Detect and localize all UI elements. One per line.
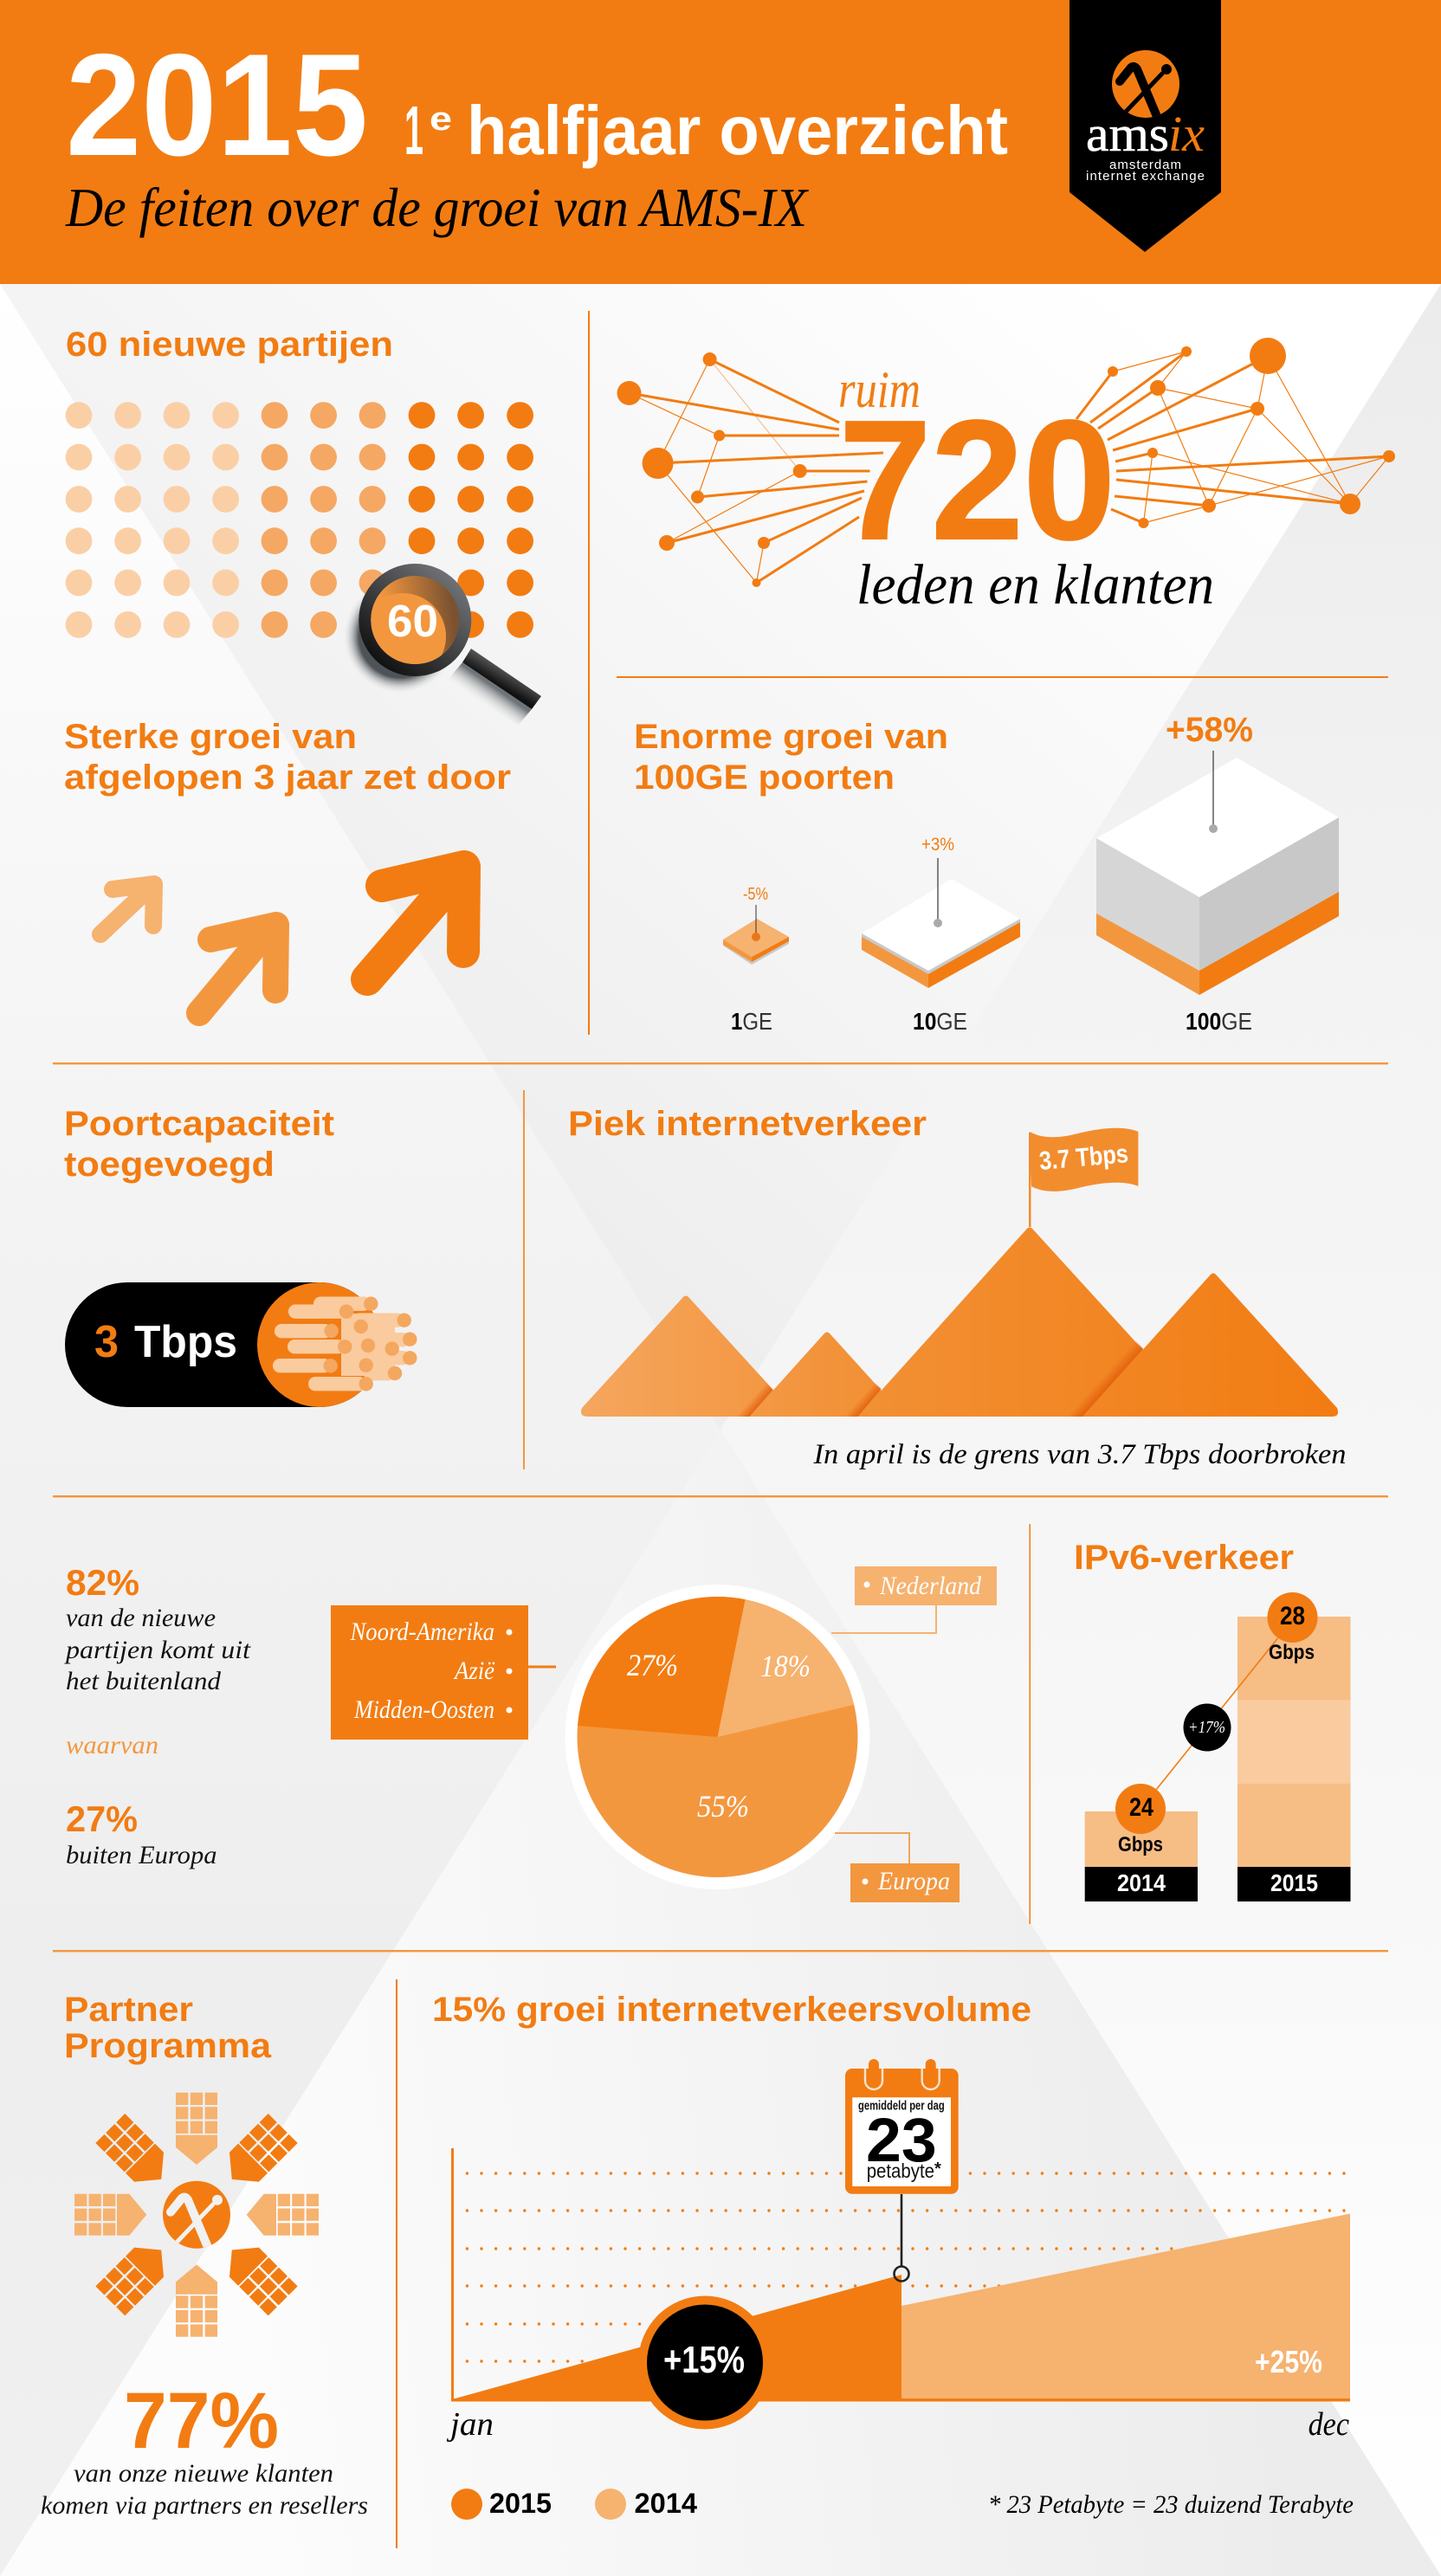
bubble 28 Gbps xyxy=(1268,1592,1318,1664)
legend: 2014 xyxy=(634,2488,697,2519)
axis label dec: dec xyxy=(1309,2406,1349,2443)
mountains xyxy=(581,1228,1338,1417)
panel: partner programma xyxy=(41,1991,368,2520)
subtitle: De feiten over de groei van AMS-IX xyxy=(65,177,810,238)
footnote: * 23 Petabyte = 23 duizend Terabyte xyxy=(988,2490,1354,2519)
heading: 60 nieuwe partijen xyxy=(66,326,393,364)
callout: Nederland: Nederland xyxy=(879,1572,982,1600)
heading: Sterke groei van xyxy=(64,718,357,756)
arrow medium xyxy=(199,925,276,1013)
heading: Poortcapaciteit xyxy=(64,1105,334,1143)
magnifier xyxy=(343,564,541,726)
panel: poortcapaciteit xyxy=(64,1105,417,1407)
divider: vertical row 2 xyxy=(523,1090,525,1469)
cube 1GE: 1GE xyxy=(731,1008,772,1035)
bar 2015 xyxy=(1237,1617,1351,1901)
heading: Piek internetverkeer xyxy=(568,1105,927,1143)
divider: vertical row 4 xyxy=(396,1979,397,2548)
cube 10GE xyxy=(862,835,1020,1035)
caption: In april is de grens van 3.7 Tbps doorbroken xyxy=(812,1439,1346,1470)
cable icon xyxy=(65,1282,417,1407)
legend: 2015 xyxy=(489,2488,552,2519)
logo banner: amsterdam xyxy=(1109,158,1181,172)
cube 1GE xyxy=(723,885,789,1035)
growth line xyxy=(1156,1638,1278,1790)
bar 2014 xyxy=(1085,1811,1198,1901)
divider: row 1 xyxy=(53,1062,1388,1064)
title: 2015: 2015 xyxy=(66,23,368,186)
header band xyxy=(0,0,1441,284)
waarvan: waarvan xyxy=(66,1731,158,1759)
bar 2015: 2015 xyxy=(1270,1869,1318,1896)
panel: sterke groei xyxy=(64,718,511,1013)
calendar: 23 xyxy=(866,2107,937,2175)
cube 10GE: +3% xyxy=(921,835,954,855)
arrow large xyxy=(367,867,464,979)
27%: 27% xyxy=(66,1798,138,1839)
flag: 3.7 Tbps xyxy=(1038,1140,1129,1176)
heading: Programma xyxy=(64,2027,272,2065)
pie: 27% xyxy=(627,1648,678,1682)
panel: internetverkeersvolume xyxy=(432,1991,1354,2520)
77%: 77% xyxy=(124,2377,279,2465)
divider: vertical top xyxy=(588,311,590,1035)
cube 100GE: 100GE xyxy=(1186,1008,1252,1035)
heading: Partner xyxy=(64,1991,193,2029)
pie: 55% xyxy=(697,1789,749,1824)
callout: buiten Europa regions: Midden-Oosten xyxy=(353,1695,494,1724)
cube 100GE xyxy=(1096,711,1339,1035)
panel: piek internetverkeer xyxy=(568,1105,1346,1470)
callout: Europa: Europa xyxy=(877,1867,950,1895)
dot grid xyxy=(66,402,533,638)
bubble 28 Gbps: 28 xyxy=(1280,1602,1305,1630)
heading: 15% groei internetverkeersvolume xyxy=(432,1991,1031,2029)
27% description: buiten Europa xyxy=(66,1841,216,1869)
badge +15% xyxy=(638,2296,772,2430)
partner icon xyxy=(74,2093,319,2337)
heading: afgelopen 3 jaar zet door xyxy=(64,759,511,797)
pie xyxy=(565,1585,869,1889)
legend xyxy=(451,2488,697,2520)
bar 2014: 2014 xyxy=(1117,1869,1166,1896)
bubble 28 Gbps: Gbps xyxy=(1269,1641,1315,1664)
82% description xyxy=(64,1604,251,1695)
big number 720: 720 xyxy=(839,385,1115,575)
bubble +17% xyxy=(1183,1704,1231,1751)
badge +15%: +15% xyxy=(663,2339,745,2381)
heading xyxy=(64,718,511,797)
divider: row 2 xyxy=(53,1495,1388,1497)
ruim: ruim xyxy=(838,361,921,418)
network graph xyxy=(617,338,1395,587)
callout: buiten Europa regions xyxy=(331,1605,556,1740)
arrow small xyxy=(100,884,154,934)
panel: 60 nieuwe partijen xyxy=(66,326,541,726)
heading: 100GE poorten xyxy=(634,759,895,797)
divider: right top xyxy=(617,676,1388,678)
divider: vertical ipv6 xyxy=(1029,1524,1031,1924)
logo banner: ix xyxy=(1168,106,1205,162)
panel: buitenland stats xyxy=(64,1562,251,1869)
calendar: gemiddeld per dag xyxy=(858,2099,945,2113)
77% description xyxy=(41,2459,368,2520)
callout: Europa xyxy=(835,1833,960,1902)
flag xyxy=(1029,1128,1138,1227)
axis label jan: jan xyxy=(446,2406,494,2443)
logo banner: ams xyxy=(1086,106,1169,162)
82% description: partijen komt uit xyxy=(64,1636,251,1664)
area chart xyxy=(451,2148,1350,2402)
calendar: * xyxy=(934,2160,941,2179)
title: 1e halfjaar overzicht: halfjaar overzicht xyxy=(467,92,1008,169)
bubble 24 Gbps xyxy=(1115,1784,1166,1856)
82%: 82% xyxy=(66,1562,139,1603)
title: 1e halfjaar overzicht: 1 xyxy=(404,92,423,169)
heading xyxy=(64,1991,272,2065)
cable icon: 3 xyxy=(94,1317,119,1367)
heading: IPv6-verkeer xyxy=(1074,1539,1294,1577)
callout: buiten Europa regions: Noord-Amerika xyxy=(350,1617,494,1646)
callout: buiten Europa regions: Azië xyxy=(453,1656,495,1685)
cube 10GE: 10GE xyxy=(913,1008,967,1035)
magnifier: 60 xyxy=(387,597,438,647)
logo banner: internet exchange xyxy=(1086,169,1205,184)
82% description: het buitenland xyxy=(66,1667,222,1695)
callout: Nederland xyxy=(831,1566,997,1633)
cable icon: Tbps xyxy=(134,1317,237,1367)
calendar: petabyte xyxy=(867,2160,934,2182)
divider: row 3 xyxy=(53,1950,1388,1952)
cube 100GE: +58% xyxy=(1166,711,1253,749)
label +25%: +25% xyxy=(1255,2344,1322,2379)
77% description: komen via partners en resellers xyxy=(41,2491,368,2520)
calendar xyxy=(845,2059,959,2281)
heading: toegevoegd xyxy=(64,1146,275,1184)
heading xyxy=(64,1105,334,1184)
title: 1e halfjaar overzicht: e xyxy=(430,101,452,138)
bubble 24 Gbps: Gbps xyxy=(1118,1833,1163,1856)
82% description: van de nieuwe xyxy=(66,1604,216,1632)
heading xyxy=(634,718,948,797)
cube 1GE: -5% xyxy=(743,885,768,904)
pie: 18% xyxy=(760,1649,811,1683)
77% description: van onze nieuwe klanten xyxy=(74,2459,333,2488)
panel: pie chart xyxy=(331,1566,997,1902)
leden en klanten: leden en klanten xyxy=(856,553,1214,617)
panel: IPv6-verkeer xyxy=(1074,1539,1351,1901)
panel: 100GE poorten xyxy=(634,711,1339,1035)
panel: 720 leden en klanten xyxy=(617,338,1395,617)
logo banner xyxy=(1069,0,1221,252)
bubble +17%: +17% xyxy=(1188,1718,1225,1737)
bubble 24 Gbps: 24 xyxy=(1129,1793,1153,1822)
heading: Enorme groei van xyxy=(634,718,948,756)
